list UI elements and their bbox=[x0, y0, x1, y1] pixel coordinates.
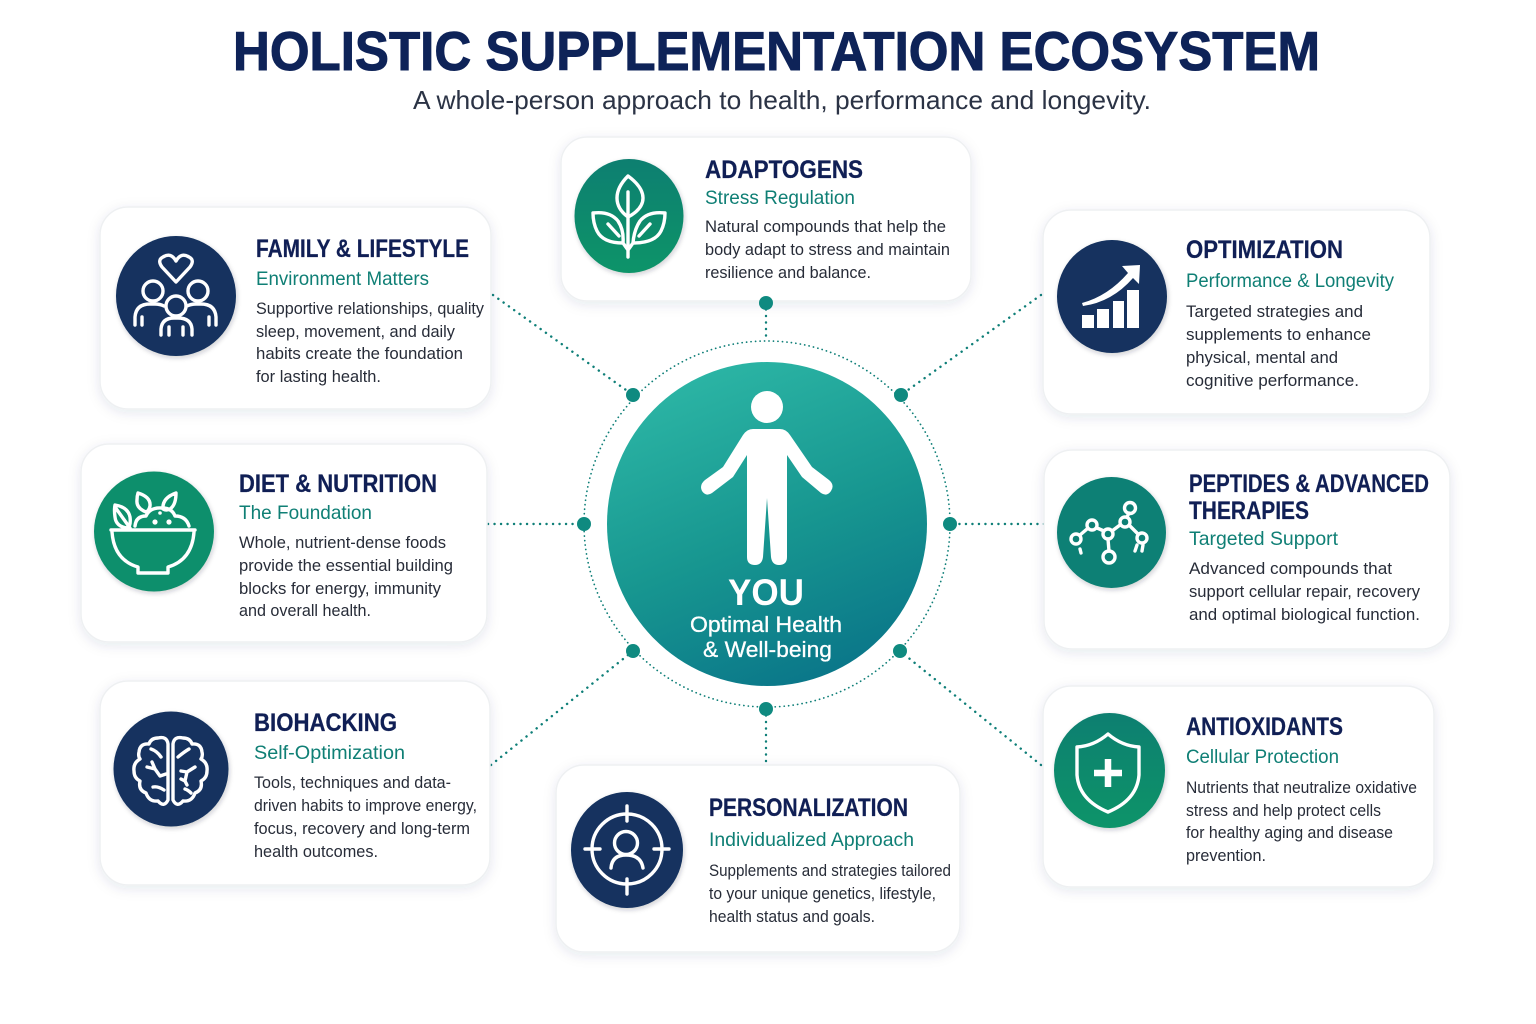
panel: family and lifestyle bbox=[100, 207, 491, 409]
description: to your unique genetics, lifestyle, bbox=[709, 885, 936, 903]
description bbox=[705, 218, 950, 282]
description: health outcomes. bbox=[254, 843, 378, 861]
heading: PERSONALIZATION bbox=[709, 794, 908, 822]
description bbox=[709, 862, 951, 926]
heading: ANTIOXIDANTS bbox=[1186, 713, 1343, 741]
icon: person bbox=[701, 391, 833, 565]
heading bbox=[1189, 470, 1429, 525]
connector nodes bbox=[577, 296, 957, 716]
icon: target person bbox=[571, 792, 683, 908]
heading: DIET & NUTRITION bbox=[239, 470, 437, 498]
description bbox=[256, 300, 485, 386]
description: supplements to enhance bbox=[1186, 326, 1371, 344]
icon: growth chart bbox=[1057, 240, 1167, 353]
icon: family bbox=[116, 236, 236, 356]
description: Natural compounds that help the bbox=[705, 218, 946, 236]
description: Whole, nutrient-dense foods bbox=[239, 534, 446, 552]
heading: PEPTIDES & ADVANCED bbox=[1189, 470, 1429, 498]
description: provide the essential building bbox=[239, 557, 453, 575]
subheading: The Foundation bbox=[239, 502, 372, 524]
description: and optimal biological function. bbox=[1189, 606, 1420, 624]
description bbox=[1186, 779, 1417, 865]
description: and overall health. bbox=[239, 602, 371, 620]
panel: antioxidants bbox=[1043, 686, 1434, 887]
connector lines bbox=[488, 295, 1044, 765]
description: driven habits to improve energy, bbox=[254, 797, 477, 815]
description: blocks for energy, immunity bbox=[239, 580, 442, 598]
description: prevention. bbox=[1186, 847, 1266, 865]
subheading: Targeted Support bbox=[1189, 528, 1339, 550]
title: HOLISTIC SUPPLEMENTATION ECOSYSTEM bbox=[233, 20, 1320, 82]
description: for lasting health. bbox=[256, 368, 381, 386]
dotted ring around centre bbox=[584, 341, 950, 707]
description: Supportive relationships, quality bbox=[256, 300, 485, 318]
description: physical, mental and bbox=[1186, 349, 1338, 367]
panel: personalization bbox=[556, 765, 960, 952]
subheading: Environment Matters bbox=[256, 268, 429, 290]
panel: diet and nutrition bbox=[81, 444, 487, 642]
description: body adapt to stress and maintain bbox=[705, 241, 950, 259]
description bbox=[239, 534, 453, 620]
description bbox=[254, 774, 477, 861]
heading: OPTIMIZATION bbox=[1186, 236, 1343, 264]
description: Targeted strategies and bbox=[1186, 303, 1363, 321]
panel: adaptogens bbox=[561, 137, 971, 301]
subheading: Individualized Approach bbox=[709, 829, 914, 851]
panel: optimization bbox=[1043, 210, 1430, 414]
description: resilience and balance. bbox=[705, 264, 871, 282]
description: Tools, techniques and data- bbox=[254, 774, 451, 792]
description: stress and help protect cells bbox=[1186, 802, 1381, 820]
panel: biohacking bbox=[100, 681, 490, 885]
you label: YOU bbox=[728, 572, 804, 613]
icon: salad bowl bbox=[94, 472, 214, 592]
heading: ADAPTOGENS bbox=[705, 156, 863, 184]
hub caption bbox=[690, 612, 842, 662]
description bbox=[1189, 560, 1421, 624]
hub caption: Optimal Health bbox=[690, 612, 842, 637]
icon: shield bbox=[1054, 713, 1165, 828]
description: support cellular repair, recovery bbox=[1189, 583, 1421, 601]
icon: molecule bbox=[1057, 477, 1166, 588]
description: health status and goals. bbox=[709, 908, 875, 926]
description: Nutrients that neutralize oxidative bbox=[1186, 779, 1417, 797]
description: Supplements and strategies tailored bbox=[709, 862, 951, 880]
heading: BIOHACKING bbox=[254, 709, 397, 737]
subheading: Stress Regulation bbox=[705, 187, 855, 209]
description: habits create the foundation bbox=[256, 345, 463, 363]
description: for healthy aging and disease bbox=[1186, 824, 1393, 842]
subheading: Cellular Protection bbox=[1186, 746, 1339, 768]
description: focus, recovery and long-term bbox=[254, 820, 470, 838]
subheading: Self-Optimization bbox=[254, 742, 405, 764]
subheading: Performance & Longevity bbox=[1186, 270, 1394, 292]
description: cognitive performance. bbox=[1186, 372, 1359, 390]
heading: FAMILY & LIFESTYLE bbox=[256, 235, 469, 263]
icon: brain bbox=[114, 712, 228, 826]
description bbox=[1186, 303, 1371, 390]
icon: plant bbox=[574, 159, 684, 273]
subtitle: A whole-person approach to health, performance and longevity. bbox=[413, 85, 1151, 115]
panel: peptides and advanced therapies bbox=[1044, 450, 1450, 649]
description: Advanced compounds that bbox=[1189, 560, 1392, 578]
central hub: you bbox=[607, 362, 927, 686]
description: sleep, movement, and daily bbox=[256, 323, 456, 341]
hub caption: & Well-being bbox=[703, 637, 832, 662]
heading: THERAPIES bbox=[1189, 497, 1309, 525]
